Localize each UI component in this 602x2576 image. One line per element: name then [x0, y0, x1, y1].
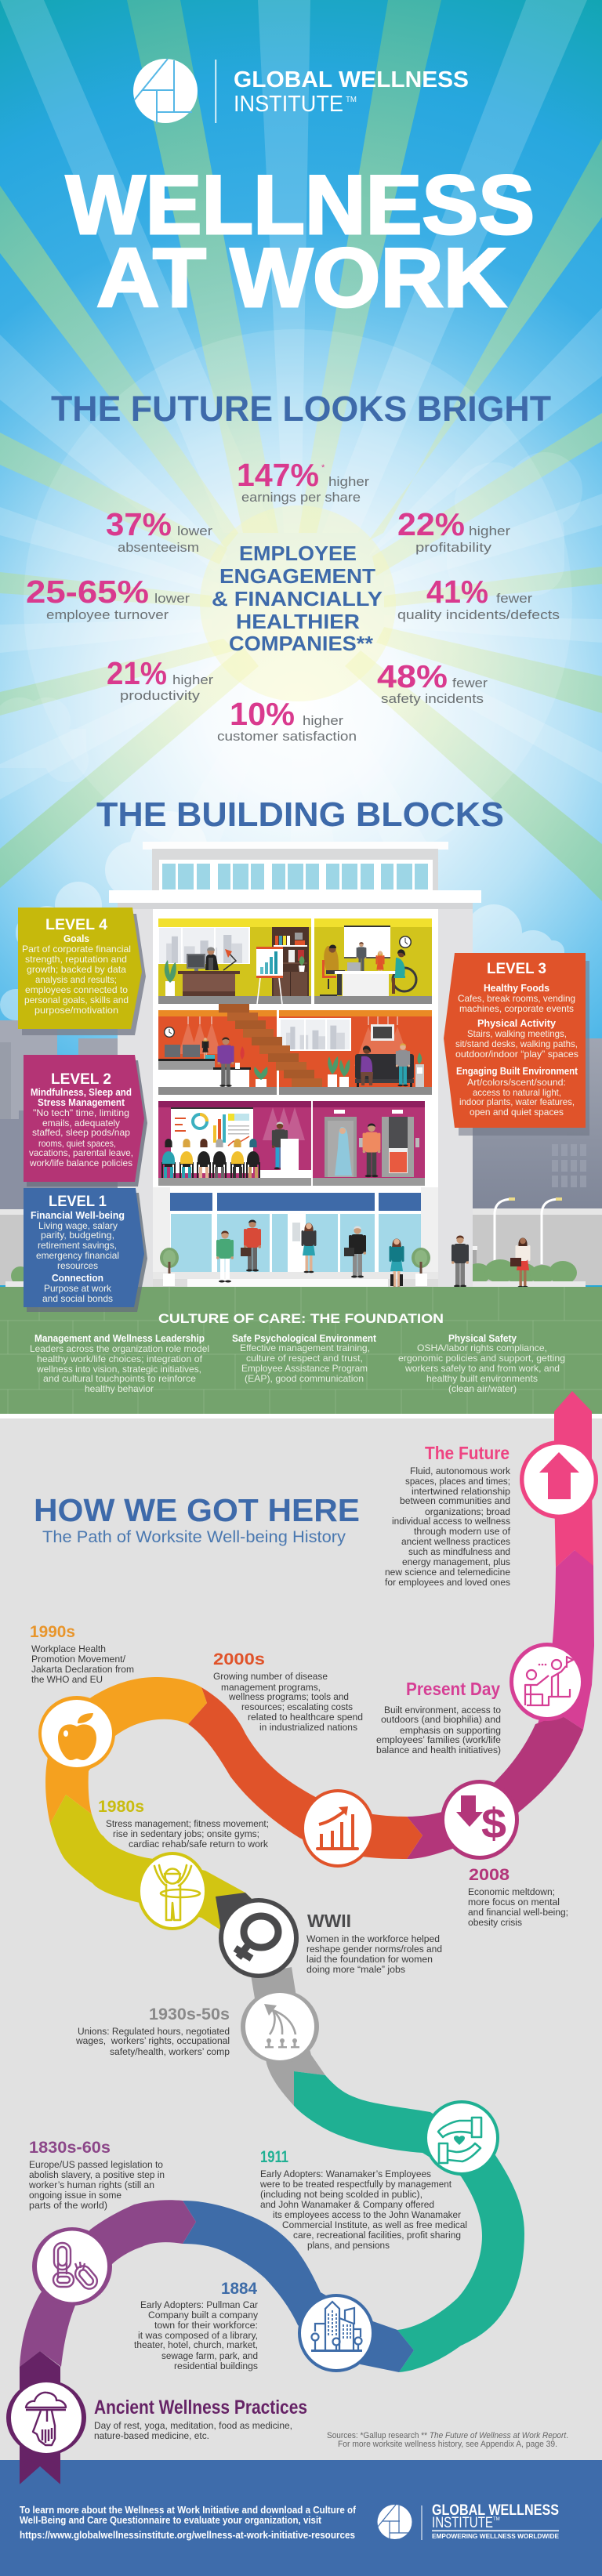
- panel: level 2 mindfulness: "No tech" time, limiting: [33, 1107, 129, 1118]
- icon: 2008 down arrow and dollar: [441, 1780, 519, 1860]
- column: management and wellness leadership: Leaders across the organization role model: [30, 1343, 209, 1354]
- text: the future: new science and telemedicine: [385, 1567, 510, 1578]
- panel: level 3 healthy foods, activity, built environment: outdoor/indoor “play” spaces: [455, 1049, 578, 1060]
- text: footer call to action: https://www.globalwellnessinstitute.org/wellness-at-work-initiative-resources: [20, 2529, 355, 2541]
- text: footer call to action: Well-Being and Care Questionnaire to evaluate your organization, visit: [20, 2514, 322, 2526]
- stat: 21% productivity: [107, 655, 213, 703]
- icon: 1980s hula hoop figure: [137, 1852, 208, 1930]
- text: 1930s-50s: Unions: Regulated hours, negotiated: [78, 2026, 230, 2037]
- text: 2000s: management programs,: [221, 1682, 321, 1693]
- stat: 147% earnings per share: [237, 457, 369, 505]
- text: 2000s: in industrialized nations: [259, 1722, 357, 1733]
- panel: level 2 mindfulness: emails, adequately: [42, 1118, 120, 1129]
- text: 1830s-60s: abolish slavery, a positive step in: [29, 2169, 165, 2180]
- text: the future: such as mindfulness and: [408, 1546, 510, 1557]
- text: 2008: obesity crisis: [468, 1917, 522, 1928]
- floor 2: presentation room and elevators: [158, 1101, 425, 1186]
- text: 1884: town for their workforce:: [154, 2320, 258, 2331]
- text: 1980s: cardiac rehab/safe return to work: [129, 1839, 269, 1850]
- text: 1930s-50s: [75, 2005, 230, 2057]
- text: WWII: doing more “male” jobs: [306, 1964, 405, 1975]
- text: the future: The Future: [425, 1443, 510, 1463]
- panel: level 2 mindfulness: work/life balance policies: [29, 1158, 132, 1168]
- panel: level 3 healthy foods, activity, built environment: access to natural light,: [473, 1087, 561, 1098]
- text: 1911: care, recreational facilities, profit sharing: [293, 2230, 461, 2241]
- central text: employee engagement: & FINANCIALLY: [212, 587, 383, 610]
- panel: level 4 goals: employees connected to: [25, 984, 128, 995]
- title: WELLNESS: [66, 158, 535, 252]
- column: safe psychological environment: Effective management training,: [240, 1342, 370, 1353]
- text: 1980s: rise in sedentary jobs; onsite gyms;: [113, 1828, 259, 1839]
- panel: level 4 goals: strength, reputation and: [25, 954, 127, 965]
- panel: level 2 mindfulness: Mindfulness, Sleep and: [31, 1087, 132, 1098]
- text: 2008: [468, 1866, 568, 1928]
- text: 1830s-60s: worker’s human rights (still an: [28, 2179, 154, 2190]
- stat: 25-65% turnover: 25-65%: [26, 574, 149, 610]
- city backdrop right: [438, 1038, 602, 1285]
- text: 2008: Economic meltdown;: [468, 1886, 555, 1897]
- panel: level 1 financial well-being: Financial Well-being: [31, 1210, 125, 1221]
- stat: 147% earnings per share: earnings per share: [241, 490, 361, 505]
- text: 1990s: Promotion Movement/: [31, 1654, 126, 1665]
- panel: level 2 mindfulness: LEVEL 2: [51, 1071, 111, 1088]
- panel: level 2 mindfulness: [24, 1055, 147, 1187]
- column: management and wellness leadership: healthy work/life choices; integration of: [37, 1353, 203, 1364]
- stat: 147% earnings per share: higher: [328, 474, 369, 489]
- panel: level 3 healthy foods, activity, built environment: Physical Activity: [477, 1018, 556, 1029]
- panel: level 2 mindfulness: vacations, parental leave,: [29, 1147, 133, 1158]
- city backdrop left: [0, 1020, 153, 1288]
- central text: employee engagement: HEALTHIER: [236, 610, 360, 633]
- panel: level 4 goals: LEVEL 4: [45, 916, 107, 933]
- stat: 41% quality incidents: [397, 574, 560, 622]
- panel: level 4 goals: Part of corporate financial: [22, 944, 131, 955]
- panel: level 2 mindfulness: staffed, sleep pods/nap: [32, 1127, 130, 1138]
- text: WWII: WWII: [307, 1911, 351, 1931]
- text: 1830s-60s: ongoing issue in some: [29, 2190, 121, 2201]
- stat: 10% customer satisfaction: [217, 696, 357, 744]
- text: 1911: its employees access to the John Wanamaker: [273, 2209, 461, 2220]
- text: 2008: 2008: [469, 1866, 510, 1884]
- column: physical safety: [398, 1333, 565, 1394]
- column: management and wellness leadership: Management and Wellness Leadership: [34, 1333, 205, 1344]
- text: 1990s: the WHO and EU: [31, 1674, 103, 1685]
- timeline path ribbon: [20, 1391, 594, 2484]
- text: the future: through modern use of: [414, 1526, 511, 1537]
- floor 3: reception and lounge: [158, 1010, 432, 1095]
- stat: 147% earnings per share: *: [321, 463, 325, 473]
- text: footer call to action: [20, 2504, 357, 2541]
- text: 1884: Early Adopters: Pullman Car: [140, 2299, 258, 2310]
- panel: level 3 healthy foods, activity, built environment: Healthy Foods: [484, 983, 549, 994]
- icon: 2000s growth chart: [301, 1789, 375, 1868]
- street lamps and bushes: [439, 1197, 586, 1288]
- icon: present day figures: [510, 1643, 585, 1721]
- text: WWII: laid the foundation for women: [306, 1954, 433, 1965]
- text: 1980s: [98, 1798, 269, 1850]
- panel: level 1 financial well-being: Purpose at work: [44, 1283, 112, 1294]
- heading: how we got here: HOW WE GOT HERE: [34, 1492, 360, 1528]
- text: sources: [327, 2431, 568, 2449]
- panel: level 1 financial well-being: LEVEL 1: [49, 1193, 107, 1210]
- icon: 2008 down arrow and dollar: $: [481, 1800, 506, 1847]
- stat: 48% safety incidents: 48%: [377, 658, 448, 694]
- footer logo: GLOBAL WELLNESS: [432, 2502, 559, 2519]
- logo: Global Wellness Institute: GLOBAL WELLNESS: [234, 67, 469, 92]
- text: ancient wellness practices: Day of rest, yoga, meditation, food as medicine,: [94, 2420, 292, 2431]
- text: 1990s: Jakarta Declaration from: [31, 1664, 134, 1675]
- panel: level 3 healthy foods, activity, built environment: sit/stand desks, walking paths,: [455, 1038, 578, 1049]
- text: 1884: it was composed of a library,: [138, 2330, 258, 2341]
- panel: level 1 financial well-being: emergency financial: [36, 1250, 119, 1261]
- text: 1884: Company built a company: [148, 2310, 259, 2321]
- column: physical safety: (clean air/water): [448, 1383, 517, 1394]
- panel: level 3 healthy foods, activity, built environment: machines, corporate events: [459, 1003, 574, 1014]
- text: 1884: residential buildings: [174, 2360, 258, 2371]
- column: physical safety: ergonomic policies and support, getting: [398, 1353, 565, 1364]
- stat: 22% profitability: higher: [469, 524, 510, 538]
- panel: level 3 healthy foods, activity, built environment: Engaging Built Environment: [456, 1066, 578, 1077]
- stat: 37% absenteeism: lower: [177, 524, 212, 538]
- text: present day: outdoors (and biophilia) and: [381, 1714, 501, 1725]
- footer logo: [378, 2502, 559, 2540]
- central text: employee engagement: EMPLOYEE: [239, 542, 357, 565]
- column: management and wellness leadership: healthy behavior: [85, 1383, 154, 1394]
- text: 1980s: Stress management; fitness movement;: [106, 1818, 269, 1829]
- ground floor: entrance: [153, 1187, 438, 1287]
- panel: level 3 healthy foods, activity, built environment: Cafes, break rooms, vending: [458, 993, 575, 1004]
- heading: how we got here: The Path of Worksite Well-being History: [42, 1528, 346, 1546]
- stat: 25-65% turnover: [26, 574, 190, 622]
- panel: level 3 healthy foods, activity, built environment: indoor plants, water features,: [459, 1096, 575, 1107]
- stat: 48% safety incidents: fewer: [452, 676, 488, 690]
- title: [66, 158, 535, 324]
- stat: 10% customer satisfaction: customer satisfaction: [217, 729, 357, 744]
- panel: level 3 healthy foods, activity, built environment: Art/colors/scent/sound:: [467, 1077, 566, 1088]
- heading: how we got here: [34, 1492, 360, 1546]
- panel: level 4 goals: analysis and results;: [35, 974, 117, 985]
- text: the future: [385, 1443, 511, 1588]
- column: physical safety: workers safely to and from work, and: [404, 1363, 560, 1374]
- panel: level 1 financial well-being: [24, 1188, 147, 1312]
- text: 1830s-60s: parts of the world): [29, 2200, 107, 2211]
- panel: level 3 healthy foods, activity, built environment: open and quiet spaces: [470, 1107, 564, 1118]
- floor 4: offices: [158, 918, 432, 1004]
- text: 1830s-60s: 1830s-60s: [29, 2139, 111, 2157]
- stat: 48% safety incidents: safety incidents: [381, 691, 484, 706]
- stat: 41% quality incidents: quality incidents/defects: [397, 607, 560, 622]
- stat: 37% absenteeism: absenteeism: [118, 540, 199, 555]
- stat: 21% productivity: productivity: [120, 688, 201, 703]
- logo: Global Wellness Institute: INSTITUTE: [234, 92, 343, 117]
- text: 1990s: Workplace Health: [31, 1643, 106, 1654]
- stat: 25-65% turnover: employee turnover: [46, 607, 169, 622]
- text: 1990s: 1990s: [30, 1623, 75, 1641]
- text: 1884: sewage farm, park, and: [161, 2350, 258, 2361]
- text: 2000s: Growing number of disease: [213, 1671, 328, 1682]
- column: physical safety: healthy built environments: [426, 1373, 538, 1384]
- text: sources: For more worksite wellness history, see Appendix A, page 39.: [338, 2440, 557, 2449]
- text: 1911: were to be treated respectfully by management: [259, 2179, 452, 2190]
- text: present day: employees’ families (work/life: [376, 1734, 501, 1745]
- icon: 1930s-50s union figures: [241, 1990, 319, 2063]
- footer logo: TM: [493, 2517, 500, 2522]
- text: WWII: Women in the workforce helped: [306, 1933, 440, 1944]
- stat: 37% absenteeism: 37%: [106, 506, 172, 542]
- text: 1990s: [30, 1623, 134, 1685]
- text: 1830s-60s: [28, 2139, 165, 2211]
- icon: 1830s-60s broken chain: [32, 2227, 112, 2306]
- text: 1911: (including not being scolded in public),: [260, 2189, 422, 2200]
- logo: Global Wellness Institute: TM: [346, 96, 357, 104]
- text: 1830s-60s: Europe/US passed legislation to: [29, 2159, 163, 2170]
- column: management and wellness leadership: [30, 1333, 209, 1394]
- text: 1884: theater, hotel, church, market,: [134, 2339, 258, 2350]
- column: safe psychological environment: Employee Assistance Program: [241, 1363, 368, 1374]
- text: the future: organizations; broad: [425, 1506, 510, 1517]
- icon: the future arrow: [520, 1440, 598, 1519]
- panel: level 3 healthy foods, activity, built environment: Stairs, walking meetings,: [467, 1028, 567, 1039]
- text: 2000s: related to healthcare spend: [248, 1712, 363, 1723]
- central text: employee engagement: ENGAGEMENT: [219, 564, 375, 588]
- stat: 21% productivity: higher: [172, 672, 213, 687]
- heading: the building blocks: THE BUILDING BLOCKS: [96, 795, 504, 834]
- stat: 48% safety incidents: [377, 658, 488, 706]
- text: WWII: reshape gender norms/roles and: [306, 1944, 442, 1955]
- text: 1911: Early Adopters: Wanamaker’s Employees: [260, 2168, 431, 2179]
- text: the future: spaces, places and times;: [405, 1476, 510, 1487]
- text: WWII: [306, 1911, 442, 1975]
- text: sources: Sources: *Gallup research ** The Future of Wellness at Work Report.: [327, 2431, 568, 2440]
- column: safe psychological environment: [232, 1333, 377, 1384]
- stat: 147% earnings per share: 147%: [237, 457, 319, 493]
- central text: employee engagement: COMPANIES**: [229, 632, 374, 655]
- column: physical safety: OSHA/labor rights compliance,: [417, 1342, 547, 1353]
- text: 2008: and financial well-being;: [468, 1907, 568, 1918]
- panel: level 4 goals: growth; backed by data: [27, 964, 126, 975]
- text: 1911: Commercial Institute, as well as free medical: [282, 2219, 467, 2230]
- stat: 22% profitability: 22%: [397, 506, 465, 542]
- panel: level 1 financial well-being: Living wage, salary: [38, 1220, 118, 1231]
- footer panel: [0, 2460, 602, 2576]
- text: the future: between communities and: [400, 1495, 510, 1506]
- stairs between floors: [219, 1004, 322, 1087]
- footer logo: INSTITUTE: [432, 2515, 493, 2531]
- column: safe psychological environment: culture of respect and trust,: [246, 1353, 363, 1364]
- footer logo: EMPOWERING WELLNESS WORLDWIDE: [432, 2532, 559, 2540]
- text: the future: ancient wellness practices: [401, 1536, 510, 1547]
- text: the future: individual access to wellness: [392, 1516, 510, 1527]
- heading: culture of care: CULTURE OF CARE: THE FOUNDATION: [158, 1311, 444, 1326]
- column: physical safety: Physical Safety: [448, 1333, 517, 1344]
- stat: 41% quality incidents: fewer: [496, 591, 532, 606]
- foundation ground: [0, 1287, 602, 1414]
- stat: 10% customer satisfaction: higher: [303, 713, 343, 728]
- text: 1930s-50s: wages, workers’ rights, occupational: [75, 2035, 230, 2046]
- stat: 22% profitability: [397, 506, 510, 555]
- panel: level 4 goals: [18, 908, 146, 1035]
- column: management and wellness leadership: and cultural touchpoints to reinforce: [43, 1373, 196, 1384]
- text: 1930s-50s: 1930s-50s: [149, 2005, 230, 2023]
- text: 1930s-50s: safety/health, workers’ comp: [110, 2046, 230, 2057]
- panel: level 4 goals: Goals: [63, 933, 89, 944]
- logo: Global Wellness Institute: [133, 59, 469, 124]
- text: ancient wellness practices: [94, 2397, 307, 2441]
- icon: ancient wellness hand and cloud: [6, 2380, 86, 2455]
- text: 2000s: wellness programs; tools and: [228, 1691, 349, 1702]
- column: management and wellness leadership: wellness into vision, strategic initiatives,: [36, 1364, 201, 1375]
- text: 1911: plans, and pensions: [307, 2240, 390, 2251]
- text: 2000s: 2000s: [213, 1650, 265, 1668]
- text: 1980s: 1980s: [98, 1798, 144, 1816]
- text: 2008: more focus on mental: [468, 1897, 560, 1908]
- text: present day: balance and health initiatives): [376, 1745, 501, 1755]
- icon: 1911 caring hands: [424, 2100, 499, 2176]
- panel: level 3 healthy foods, activity, built environment: LEVEL 3: [487, 960, 546, 977]
- text: 1911: [259, 2148, 467, 2251]
- pedestrians: [216, 1219, 530, 1288]
- stat: 21% productivity: 21%: [107, 655, 167, 691]
- icon: 1884 company town: [298, 2294, 375, 2372]
- panel: level 1 financial well-being: resources: [57, 1260, 98, 1271]
- text: the future: for employees and loved ones: [385, 1577, 510, 1588]
- text: ancient wellness practices: Ancient Wellness Practices: [94, 2397, 307, 2418]
- panel: level 1 financial well-being: retirement savings,: [38, 1240, 117, 1251]
- stat: 25-65% turnover: lower: [154, 591, 190, 606]
- central text: employee engagement: [212, 542, 383, 655]
- text: 1884: [134, 2280, 259, 2371]
- text: 2000s: resources; escalating costs: [241, 1701, 353, 1712]
- text: 1911: 1911: [260, 2148, 288, 2166]
- panel: level 3 healthy foods, activity, built environment: [444, 953, 589, 1136]
- text: the future: Fluid, autonomous work: [410, 1466, 511, 1476]
- text: present day: Present Day: [406, 1679, 500, 1699]
- text: present day: [376, 1679, 501, 1755]
- stat: 41% quality incidents: 41%: [426, 574, 488, 610]
- sky background with sun rays: [0, 0, 602, 1301]
- text: footer call to action: To learn more about the Wellness at Work Initiative and download a Culture of: [20, 2504, 357, 2516]
- stat: 10% customer satisfaction: 10%: [230, 696, 295, 732]
- text: the future: energy management, plus: [402, 1556, 510, 1567]
- icon: 1990s apple: [38, 1696, 115, 1771]
- panel: level 1 financial well-being: and social bonds: [42, 1293, 113, 1304]
- text: 1911: and John Wanamaker & Company offered: [260, 2199, 434, 2210]
- text: present day: emphasis on supporting: [400, 1725, 501, 1736]
- icon: WWII female symbol: [219, 1898, 299, 1978]
- text: 1884: 1884: [221, 2280, 257, 2298]
- panel: level 1 financial well-being: Connection: [52, 1273, 103, 1284]
- building: [109, 842, 481, 1287]
- panel: level 4 goals: personal goals, skills and: [24, 995, 129, 1005]
- panel: level 4 goals: purpose/motivation: [34, 1005, 118, 1016]
- column: safe psychological environment: Safe Psychological Environment: [232, 1333, 377, 1344]
- panel: level 1 financial well-being: parity, budgeting,: [41, 1230, 114, 1241]
- panel: level 2 mindfulness: rooms, quiet spaces,: [38, 1138, 116, 1149]
- text: ancient wellness practices: nature-based medicine, etc.: [94, 2430, 209, 2441]
- text: 2000s: [213, 1650, 363, 1733]
- column: safe psychological environment: (EAP), good communication: [245, 1373, 364, 1384]
- title: AT WORK: [96, 230, 506, 324]
- heading: the future looks bright: THE FUTURE LOOKS BRIGHT: [51, 389, 551, 429]
- text: present day: Built environment, access to: [384, 1705, 501, 1716]
- stat: 37% absenteeism: [106, 506, 212, 555]
- stat: 22% profitability: profitability: [415, 540, 492, 555]
- panel: level 2 mindfulness: Stress Management: [38, 1097, 125, 1108]
- text: the future: intertwined relationship: [412, 1486, 510, 1497]
- history section background: [0, 1414, 602, 2460]
